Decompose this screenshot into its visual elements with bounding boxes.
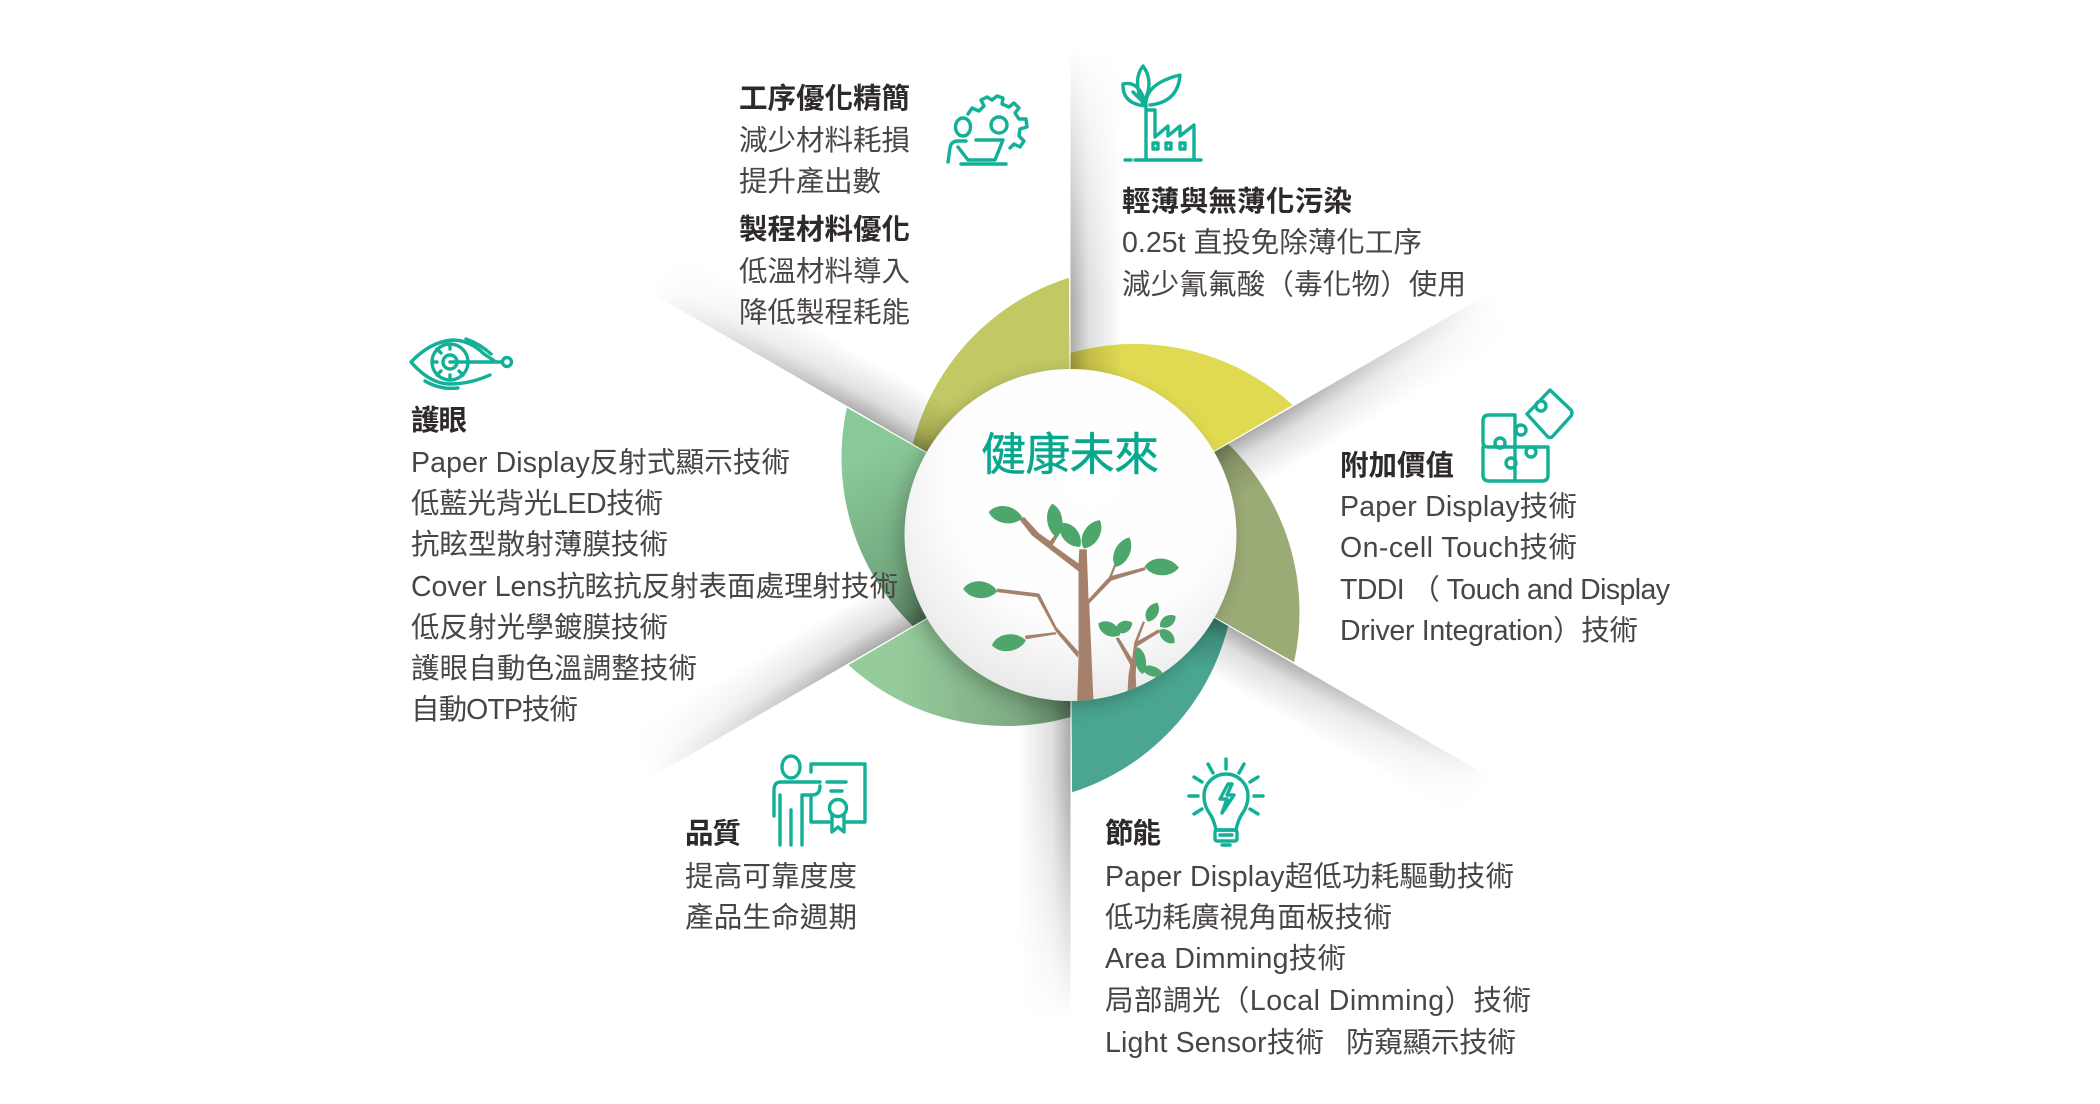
text block: added value: On-cell Touch技術 bbox=[1340, 532, 1577, 564]
icon: puzzle bbox=[1483, 390, 1572, 481]
text block: eye care: 護眼 bbox=[411, 405, 467, 437]
text block: energy saving bbox=[1105, 818, 1531, 1059]
text block: eye care: 低反射光學鍍膜技術 bbox=[411, 612, 668, 644]
text block: added value bbox=[1340, 450, 1671, 647]
title: center: 健康未來 bbox=[981, 429, 1159, 480]
text block: eye care bbox=[411, 405, 898, 726]
text block: eye care: 護眼自動色溫調整技術 bbox=[411, 653, 697, 685]
text block: energy saving: 局部調光（Local Dimming）技術 bbox=[1105, 985, 1531, 1017]
text block: process and materials: 工序優化精簡 bbox=[739, 83, 910, 115]
text block: eye care: 抗眩型散射薄膜技術 bbox=[411, 529, 668, 561]
text block: thin and pollution free bbox=[1122, 185, 1466, 301]
text block: thin and pollution free: 輕薄與無薄化污染 bbox=[1122, 185, 1352, 218]
center disc bbox=[904, 369, 1236, 701]
text block: added value: Driver Integration）技術 bbox=[1340, 615, 1638, 647]
text block: quality: 提高可靠度度 bbox=[685, 861, 857, 893]
text block: added value: Paper Display技術 bbox=[1340, 491, 1577, 523]
tree illustration bbox=[963, 503, 1179, 704]
text block: energy saving: 節能 bbox=[1105, 818, 1161, 850]
icon: eye bbox=[411, 339, 512, 388]
text block: thin and pollution free: 0.25t 直投免除薄化工序 bbox=[1122, 227, 1422, 259]
petal: sage bbox=[1070, 439, 1347, 727]
text block: process and materials: 提升產出數 bbox=[739, 166, 881, 198]
text block: eye care: Cover Lens抗眩抗反射表面處理射技術 bbox=[411, 571, 898, 603]
petal: green left bbox=[794, 343, 1070, 631]
icon: light bulb bbox=[1189, 759, 1263, 845]
text block: added value: 附加價值 bbox=[1340, 450, 1454, 482]
text block: quality bbox=[685, 818, 857, 934]
text block: process and materials: 製程材料優化 bbox=[739, 214, 910, 246]
text block: process and materials: 減少材料耗損 bbox=[739, 125, 910, 157]
petal: olive bbox=[905, 247, 1182, 535]
text block: process and materials: 降低製程耗能 bbox=[739, 297, 910, 329]
icon: plant factory bbox=[1123, 66, 1201, 160]
petal: teal bbox=[960, 535, 1236, 823]
text block: eye care: Paper Display反射式顯示技術 bbox=[411, 447, 790, 479]
icon: presenter with certificate bbox=[774, 756, 865, 845]
icon: person with gear bbox=[948, 96, 1027, 164]
text block: energy saving: Light Sensor技術 bbox=[1105, 1027, 1324, 1059]
text block: added value: TDDI （ Touch and Display bbox=[1340, 574, 1671, 606]
text block: energy saving: Area Dimming技術 bbox=[1105, 943, 1346, 975]
text block: energy saving: 防窺顯示技術 bbox=[1346, 1027, 1516, 1059]
text block: energy saving: 低功耗廣視角面板技術 bbox=[1105, 902, 1392, 934]
text block: process and materials: 低溫材料導入 bbox=[739, 256, 910, 288]
text block: process and materials bbox=[739, 83, 910, 329]
petal: yellow bbox=[1070, 344, 1292, 535]
text block: energy saving: Paper Display超低功耗驅動技術 bbox=[1105, 861, 1514, 893]
petal: light green bottom bbox=[848, 535, 1070, 726]
text block: eye care: 自動OTP技術 bbox=[411, 694, 578, 726]
text block: eye care: 低藍光背光LED技術 bbox=[411, 488, 663, 520]
text block: quality: 品質 bbox=[685, 818, 741, 850]
text block: thin and pollution free: 減少氰氟酸（毒化物）使用 bbox=[1122, 269, 1466, 301]
text block: quality: 產品生命週期 bbox=[685, 902, 857, 934]
pinwheel diagram bbox=[624, 50, 1517, 1020]
